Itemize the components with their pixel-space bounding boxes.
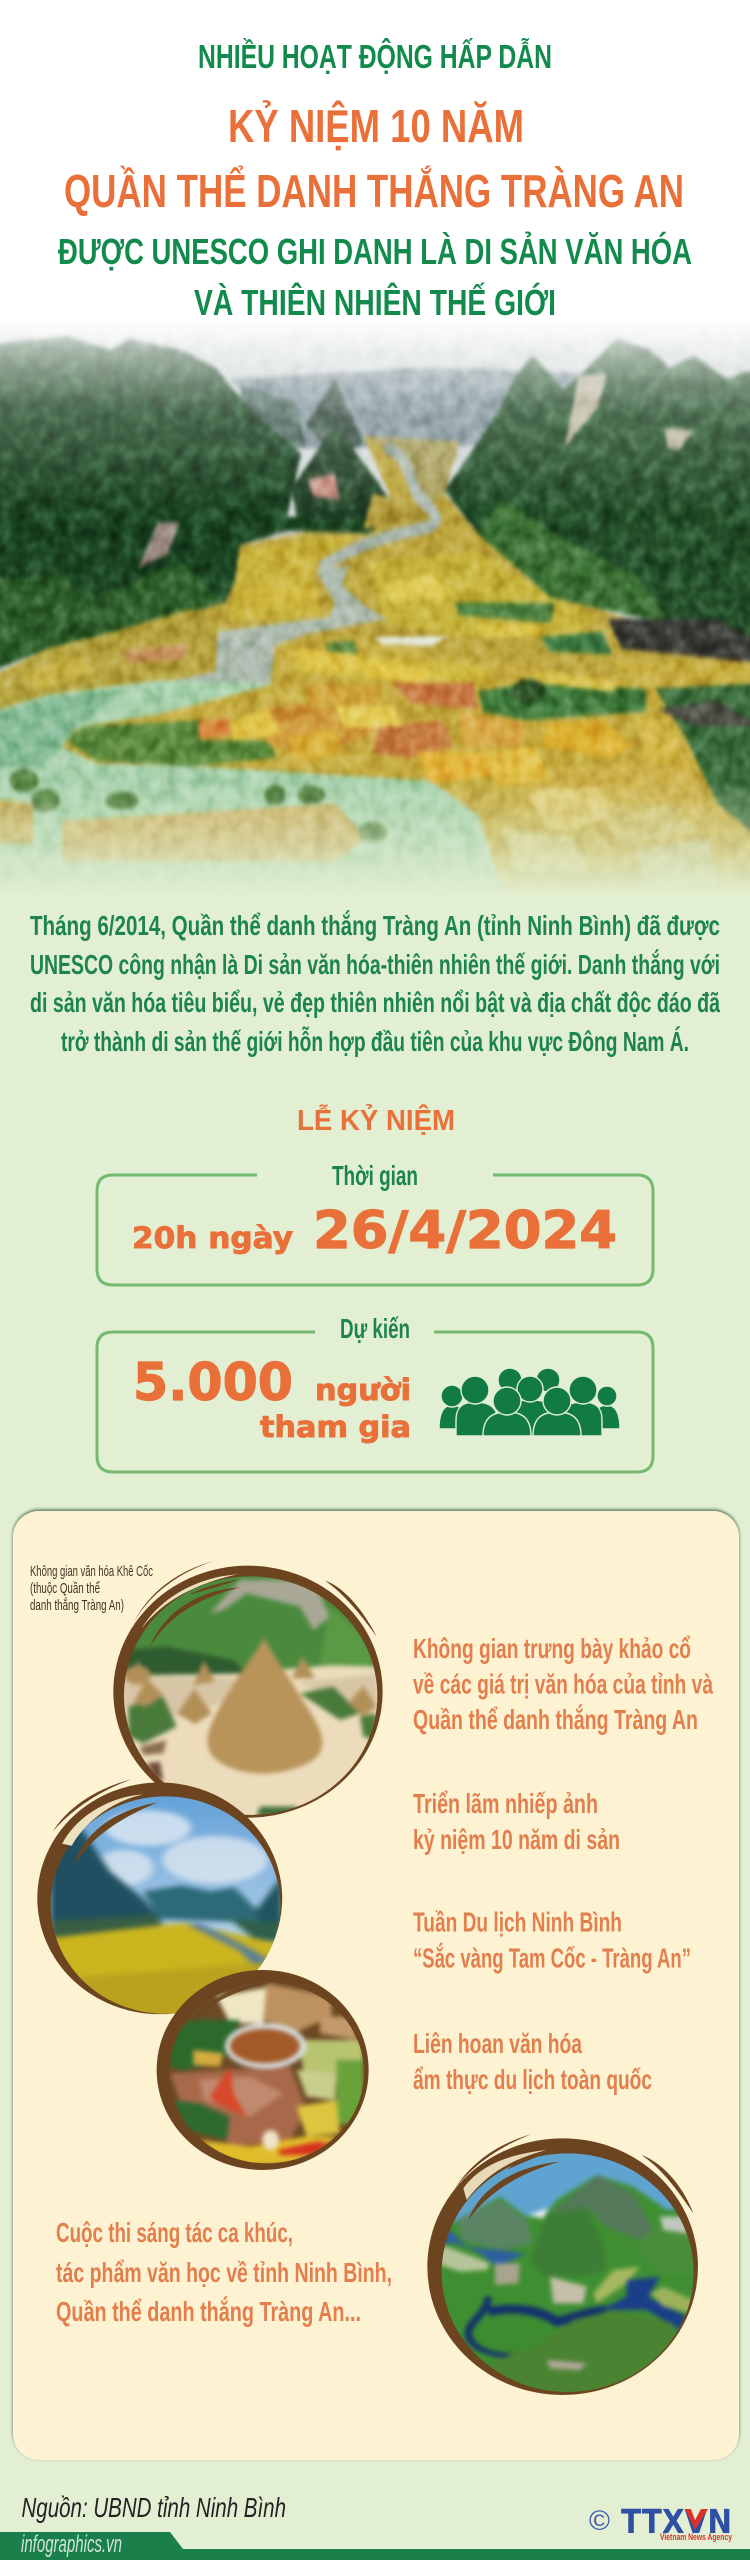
heading <box>58 37 692 323</box>
activity: photo exhibition <box>413 1788 620 1855</box>
photo: aerial karst <box>427 2134 700 2397</box>
logo: TTXVN: TTXVN <box>621 2502 732 2541</box>
footer bar <box>0 2531 750 2560</box>
activity: tourism week: Tuần Du lịch Ninh Bình <box>413 1906 622 1938</box>
attendance unit 1: người <box>315 1373 411 1407</box>
photo caption: danh thắng Tràng An) <box>30 1597 124 1614</box>
photo: thatched cones <box>113 1561 383 1820</box>
activity: composition contest: tác phẩm văn học về tỉnh Ninh Bình, <box>56 2257 392 2288</box>
logo: TTXVN: © <box>589 2505 610 2536</box>
date: 26/4/2024 <box>313 1201 617 1261</box>
section heading: lễ kỷ niệm: LỄ KỶ NIỆM <box>297 1103 455 1137</box>
activity: tourism week <box>413 1906 691 1974</box>
intro paragraph <box>30 910 720 1057</box>
photo caption: (thuộc Quần thể <box>30 1580 100 1597</box>
panel: activities <box>13 1511 739 2460</box>
icon: crowd <box>439 1368 620 1436</box>
photo: rice valley <box>37 1779 292 2022</box>
activity: photo exhibition: kỷ niệm 10 năm di sản <box>413 1824 620 1855</box>
attendance unit 2: tham gia <box>260 1410 411 1444</box>
activity: culinary festival <box>413 2028 652 2095</box>
heading line: kicker: NHIỀU HOẠT ĐỘNG HẤP DẪN <box>198 37 552 75</box>
photo: food platter <box>157 1970 370 2170</box>
activity: composition contest: Cuộc thi sáng tác ca khúc, <box>56 2217 293 2248</box>
panel: time <box>97 1160 653 1285</box>
time prefix: 20h ngày <box>132 1221 293 1255</box>
logo: TTXVN <box>589 2502 732 2542</box>
attendance number: 5.000 <box>133 1353 293 1413</box>
activity: culinary festival: Liên hoan văn hóa <box>413 2028 582 2059</box>
photo caption: Không gian văn hóa Khê Cốc <box>30 1563 153 1580</box>
photo caption <box>30 1563 153 1614</box>
mountain haze <box>0 318 750 512</box>
source: Nguồn: UBND tỉnh Ninh Bình <box>22 2492 286 2523</box>
panel: attendance <box>97 1313 653 1472</box>
bottom fade <box>0 780 750 896</box>
footer site: infographics.vn <box>21 2531 122 2558</box>
heading line: main 1: KỶ NIỆM 10 NĂM <box>228 100 524 152</box>
activity list <box>56 1633 713 2327</box>
time label: Thời gian <box>332 1160 418 1191</box>
activity: composition contest: Quần thể danh thắng Tràng An... <box>56 2296 361 2327</box>
activity: photo exhibition: Triển lãm nhiếp ảnh <box>413 1788 598 1819</box>
activity: archaeology exhibit <box>413 1633 713 1735</box>
attendance label: Dự kiến <box>340 1313 410 1344</box>
activity: composition contest <box>56 2217 392 2327</box>
heading line: sub 2: VÀ THIÊN NHIÊN THẾ GIỚI <box>194 281 556 323</box>
hero landscape photo <box>0 318 750 907</box>
